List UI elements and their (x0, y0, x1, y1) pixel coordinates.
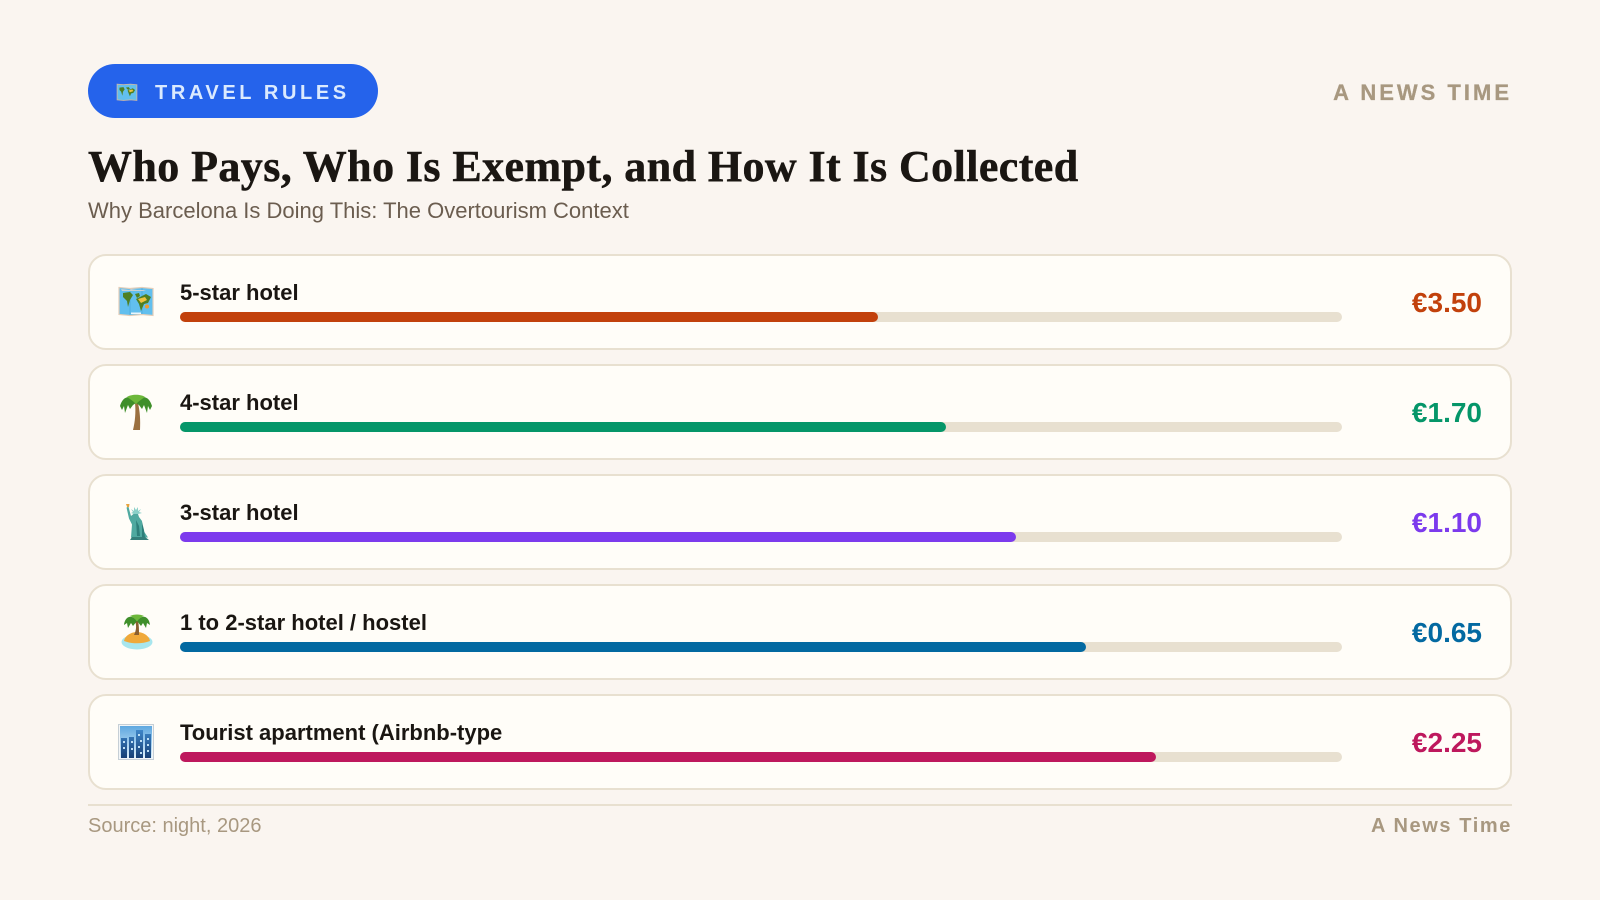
label: 5-star hotel (180, 280, 299, 305)
label: 4-star hotel (180, 390, 299, 415)
icon: desert island (122, 614, 152, 650)
bar (180, 532, 1342, 542)
brand name: A NEWS TIME (1333, 80, 1512, 105)
bar (180, 312, 1342, 322)
value: €2.25 (1412, 727, 1482, 758)
label: 3-star hotel (180, 500, 299, 525)
icon: palm tree (120, 394, 152, 430)
label: 1 to 2-star hotel / hostel (180, 610, 427, 635)
value: €1.10 (1412, 507, 1482, 538)
source note: Source: night, 2026 (88, 815, 261, 837)
badge: travel rules (88, 64, 378, 118)
bar (180, 422, 1342, 432)
card: 5-star hotel (88, 254, 1512, 350)
card: 3-star hotel (88, 474, 1512, 570)
subtitle: Why Barcelona Is Doing This: The Overtourism Context (88, 198, 629, 223)
badge text: TRAVEL RULES (155, 82, 350, 104)
card: 1 to 2-star hotel / hostel (88, 584, 1512, 680)
label: Tourist apartment (Airbnb-type (180, 720, 502, 745)
bar (180, 752, 1342, 762)
bar (180, 642, 1342, 652)
value: €3.50 (1412, 287, 1482, 318)
title: Who Pays, Who Is Exempt, and How It Is Collected (88, 142, 1079, 191)
icon: badge map (116, 84, 138, 101)
icon: map (118, 286, 154, 316)
brand footer: A News Time (1371, 815, 1512, 837)
value: €1.70 (1412, 397, 1482, 428)
icon: statue of liberty (126, 504, 149, 540)
card: tourist apartment (88, 694, 1512, 790)
card: 4-star hotel (88, 364, 1512, 460)
icon: cityscape (118, 724, 154, 760)
value: €0.65 (1412, 617, 1482, 648)
